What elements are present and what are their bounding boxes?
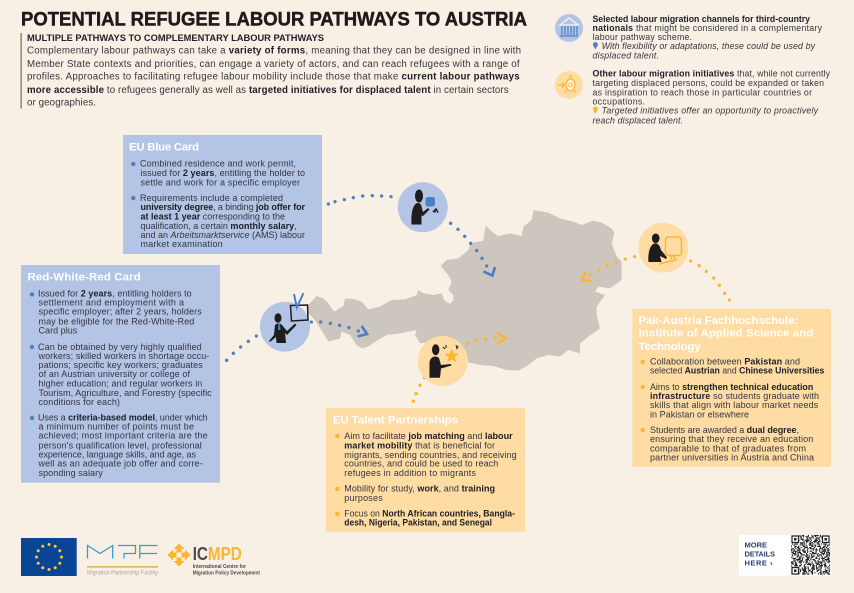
panel: Pak-Austria Fachhochschule: comparable to that of graduates from [650,444,806,454]
icon: person with star (EU Talent Partnerships) [418,336,468,386]
panel: EU Talent Partnerships: Mobility for study, work, and training [344,484,495,494]
panel: EU Blue Card [123,135,322,254]
legend: labour migration channels [555,14,823,61]
icon: person with checked document (Red-White-Red Card) [260,293,310,352]
panel: EU Blue Card: issued for 2 years, entitling the holder to [140,168,305,178]
panel: Pak-Austria Fachhochschule: ensuring that they receive an education [650,434,813,444]
dotted arrow: EU Blue Card to map [327,194,495,276]
icon: target with arrow [555,71,583,99]
legend: other initiatives: targeting displaced persons, could be expanded or taken [592,78,824,88]
panel: EU Talent Partnerships: refugees in addition to migrants [344,468,476,478]
panel: Pak-Austria Fachhochschule [632,309,831,467]
intro text block: Complementary labour pathways can take a variety of forms, meaning that they can be designed in line with [27,46,521,57]
panel: EU Blue Card: settle and work for a specific employer [140,178,300,188]
panel: EU Talent Partnerships: market mobility that is beneficial for [344,441,495,451]
logo: ICMPD: International Centre for [193,564,246,570]
label: more details here [744,540,775,568]
panel: Red-White-Red Card: pations; specific key workers; graduates [38,360,203,370]
label: more details here: MORE [744,540,767,549]
heading: Pak-Austria Fachhochschule: Institute of Applied Science and [638,328,813,340]
panel: Red-White-Red Card: well as an adequate job offer and corre- [38,459,203,469]
panel: EU Blue Card: Requirements include a completed [140,193,283,203]
map of Austria [308,210,622,371]
panel: EU Talent Partnerships: countries, and could be used to reach [344,459,498,469]
panel: Red-White-Red Card: Uses a criteria-based model, under which [38,413,208,423]
intro text block: more accessible to refugees generally as well as targeted initiatives for displaced talent in certain sectors [27,85,509,96]
panel: EU Blue Card: qualification, a certain monthly salary, [140,221,297,231]
legend: labour migration channels: displaced talent. [592,51,659,61]
panel: EU Talent Partnerships: Focus on North African countries, Bangla- [344,509,515,519]
panel: Red-White-Red Card: Can be obtained by very highly qualified [38,342,202,352]
label: more details here: DETAILS [744,549,775,558]
legend: other initiatives [555,69,831,125]
dotted arrow: Red-White-Red Card to map [225,320,367,362]
legend: labour migration channels: With flexibility or adaptations, these could be used by [602,41,816,51]
icon: person holding card (EU Blue Card) [398,182,448,232]
logo: ICMPD: Migration Policy Development [193,570,260,576]
icon: person at computer (Pak-Austria) [638,223,688,273]
logo: EU flag [21,538,77,576]
panel: EU Blue Card: university degree, a binding job offer for [140,202,305,212]
panel: EU Talent Partnerships: desh, Nigeria, Pakistan, and Senegal [344,518,492,528]
panel: Red-White-Red Card: Tourism, Agriculture, and Forestry (specific [38,388,212,398]
panel: Pak-Austria Fachhochschule: Aims to strengthen technical education [650,382,813,392]
intro text block: profiles. Approaches to facilitating refugee labour mobility include those that make current labour pathways [27,72,520,83]
panel: Pak-Austria Fachhochschule: infrastructure so students graduate with [650,391,819,401]
legend: other initiatives: occupations. [592,97,645,107]
QR code [791,535,830,575]
panel: Red-White-Red Card: experience, language skills, and age, as [38,450,196,460]
panel: Red-White-Red Card: specific employer; after 2 years, holders [38,307,202,317]
intro text block: or geographies. [27,97,96,108]
panel: EU Talent Partnerships [326,408,525,532]
legend: labour migration channels: labour pathway scheme. [592,32,692,42]
panel: Red-White-Red Card: conditions for each) [38,397,120,407]
panel: Red-White-Red Card: settlement and employment with a [38,298,184,308]
panel: Red-White-Red Card: workers; skilled workers in shortage occu- [38,351,209,361]
panel: Pak-Austria Fachhochschule: Collaboration between Pakistan and [650,357,800,367]
heading: Pak-Austria Fachhochschule: Technology [638,341,701,353]
heading: Pak-Austria Fachhochschule: Pak-Austria Fachhochschule: [638,315,798,327]
panel: Pak-Austria Fachhochschule: skills that align with labour market needs [650,400,819,410]
panel: Pak-Austria Fachhochschule: partner universities in Austria and China [650,453,814,463]
logo: ICMPD [168,544,260,576]
heading: Red-White-Red Card: Red-White-Red Card [28,272,141,284]
legend: labour migration channels: nationals that might be considered in a complementary [592,23,823,33]
panel: Pak-Austria Fachhochschule: selected Austrian and Chinese Universities [650,366,824,376]
label: more details here: HERE › [744,559,773,568]
intro text block: Member State contexts and priorities, can engage a variety of actors, and can reach refugees with a range of [27,59,520,70]
panel: EU Talent Partnerships: purposes [344,493,383,503]
panel: Red-White-Red Card: Issued for 2 years, entitling holders to [38,289,192,299]
legend: other initiatives: as inspiration to reach those in particular countries or [592,87,812,97]
panel: Pak-Austria Fachhochschule: Students are awarded a dual degree, [650,425,799,435]
panel: Red-White-Red Card: achieved; most important criteria are the [38,431,208,441]
heading: Pak-Austria Fachhochschule [638,315,813,353]
panel: Red-White-Red Card: Card plus [38,326,78,336]
panel: EU Talent Partnerships: migrants, sending countries, and receiving [344,450,517,460]
logo: Migration Partnership Facility: Migration Partnership Facility [87,570,159,577]
logo: ICMPD: ICMPD [193,544,242,564]
panel: Red-White-Red Card: of an Austrian university or college of [38,369,190,379]
panel: Red-White-Red Card: higher education; and regular workers in [38,379,202,389]
icon: institution building [555,14,583,42]
panel: Red-White-Red Card: person's qualification level, professional [38,441,202,451]
panel: Red-White-Red Card [21,265,220,483]
legend: other initiatives: Targeted initiatives offer an opportunity to proactively [602,106,819,116]
title: POTENTIAL REFUGEE LABOUR PATHWAYS TO AUSTRIA [21,8,527,30]
logo: Migration Partnership Facility [87,546,159,577]
legend: other initiatives: reach displaced talent. [592,115,683,125]
panel: EU Talent Partnerships: Aim to facilitate job matching and labour [344,431,513,441]
legend: labour migration channels: Selected labour migration channels for third-country [592,14,810,24]
panel: Pak-Austria Fachhochschule: in Pakistan or elsewhere [650,409,749,419]
panel: Red-White-Red Card: may be eligible for the Red-White-Red [38,317,194,327]
heading: EU Talent Partnerships: EU Talent Partnerships [333,414,458,426]
panel: Red-White-Red Card: sponding salary [38,468,103,478]
heading: EU Blue Card: EU Blue Card [129,142,199,154]
dotted arrow: Pak-Austria to map [582,255,731,302]
panel: EU Blue Card: market examination [140,239,223,249]
intro text block [21,32,521,108]
legend: other initiatives: Other labour migration initiatives that, while not currently [592,69,831,79]
intro text block: MULTIPLE PATHWAYS TO COMPLEMENTARY LABOUR PATHWAYS [27,32,324,43]
more details callout with QR code [739,535,830,576]
panel: Red-White-Red Card: a minimum number of points must be [38,422,194,432]
dotted arrow: EU Talent Partnerships to map [412,333,505,403]
panel: EU Blue Card: and an Arbeitsmarktservice (AMS) labour [140,230,305,240]
panel: EU Blue Card: Combined residence and work permit, [140,159,296,169]
panel: EU Blue Card: at least 1 year corresponding to the [140,212,285,222]
